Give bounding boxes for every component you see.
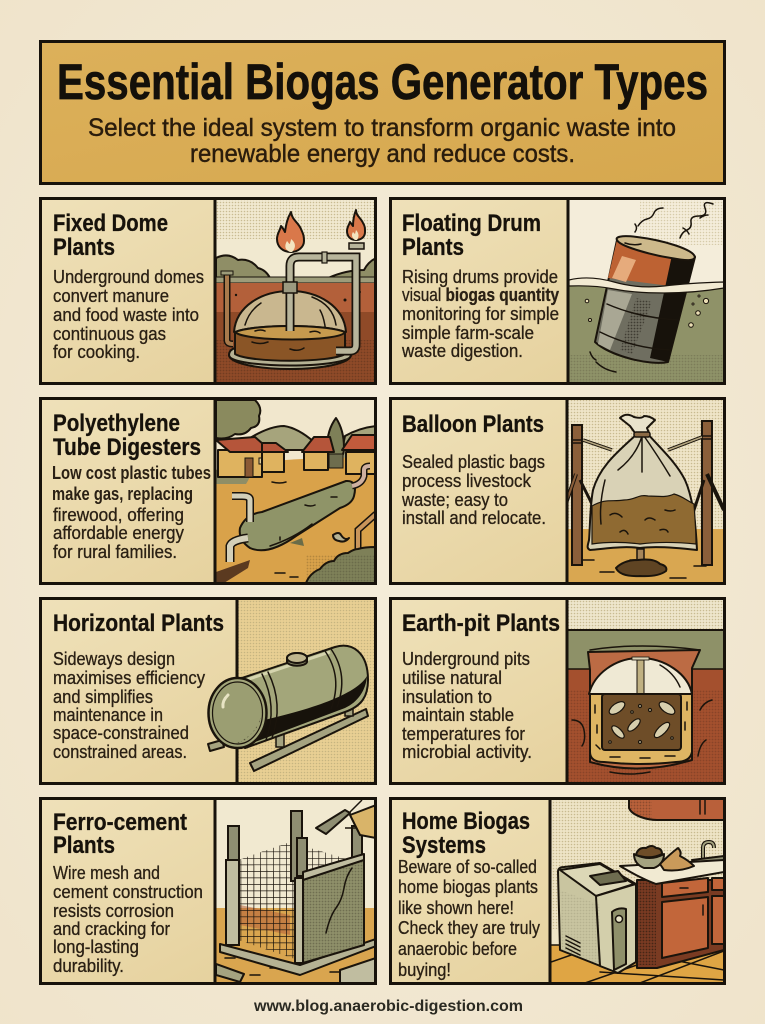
header panel (40, 42, 724, 184)
heading: Horizontal Plants: Horizontal Plants (53, 610, 224, 637)
divider (214, 398, 216, 583)
text: Ferro-cement description: and cracking for (53, 919, 170, 939)
tank end (208, 678, 266, 748)
text: Polyethylene description: firewood, offering (53, 505, 184, 525)
icon: plastic tube digester (240, 481, 355, 550)
houses (218, 450, 262, 477)
text: Balloon description: waste; easy to (401, 490, 508, 510)
panel frame (390, 398, 724, 584)
panel frame (40, 398, 376, 584)
text: Horizontal description: and simplifies (53, 687, 153, 707)
panel frame (40, 798, 376, 984)
text: Polyethylene description: make gas, replacing (52, 484, 193, 504)
posts (228, 826, 239, 861)
icon: slurry (234, 325, 346, 360)
illustration: rural village with tube digester (216, 399, 376, 583)
pipes (232, 496, 250, 522)
text: Home Biogas warning: buying! (398, 960, 451, 980)
heading: Ferro-cement Plants (53, 809, 187, 859)
illustration: kitchen with home biogas unit (551, 799, 724, 983)
icon: plastic bag (588, 433, 697, 550)
text: Balloon description: Sealed plastic bags (402, 452, 545, 472)
heading: Floating Drum Plants: Floating Drum (402, 210, 541, 237)
icon: left post (568, 424, 612, 566)
panel: Fixed Dome Plants (40, 198, 376, 384)
text: Horizontal description: maximises efficiency (53, 668, 205, 688)
icon: right post (668, 421, 724, 565)
timber pieces (216, 964, 244, 982)
illustration: floating drum (569, 199, 724, 385)
text: Home Biogas warning: Check they are truly (398, 918, 540, 938)
bag outlet and muck pile (637, 549, 644, 561)
floor (551, 945, 724, 983)
subtitle: renewable energy and reduce costs. (190, 140, 575, 168)
text: Ferro-cement description: durability. (53, 956, 124, 976)
heading: Home Biogas Systems: Systems (402, 832, 486, 859)
text: Earth-pit description: utilise natural (402, 668, 502, 688)
text: Home Biogas warning (398, 857, 540, 980)
heading: Earth-pit Plants: Earth-pit Plants (402, 610, 560, 637)
text: Earth-pit description (402, 649, 532, 762)
icon: water surface (569, 278, 724, 293)
base slab (220, 939, 376, 975)
divider (214, 198, 216, 383)
text: Ferro-cement description: cement construction (53, 882, 203, 902)
text: Fixed Dome description: for cooking. (53, 342, 140, 362)
text: Floating Drum description: waste digestion. (401, 341, 523, 361)
divider (566, 198, 570, 383)
rails (208, 740, 224, 751)
icon: counter top (620, 860, 724, 884)
panel frame (390, 598, 724, 784)
divider (214, 798, 216, 983)
text: Polyethylene description: for rural families. (53, 542, 177, 562)
heading: Polyethylene Tube Digesters: Polyethylene (53, 410, 180, 437)
icon: base ring (229, 348, 351, 369)
panel frame (40, 598, 376, 784)
heading: Home Biogas Systems: Home Biogas (402, 808, 530, 835)
icon: gas pipes (290, 257, 356, 351)
panel frame (390, 798, 724, 984)
icon: horizontal tank (208, 646, 368, 771)
heading: Fixed Dome Plants: Plants (53, 234, 115, 261)
text: Home Biogas warning: anaerobic before (398, 939, 517, 959)
icon: food waste bowl (634, 854, 664, 868)
text: Earth-pit description: temperatures for (402, 724, 525, 744)
divider (566, 398, 568, 583)
panel: Floating Drum Plants (390, 198, 725, 385)
icon: digestate with microbes (602, 694, 681, 750)
heading: Fixed Dome Plants: Fixed Dome (53, 210, 168, 237)
text: Fixed Dome description: convert manure (53, 286, 169, 306)
illustration: balloon digester (568, 400, 723, 582)
text: Polyethylene description (52, 463, 211, 562)
text: Ferro-cement description: Wire mesh and (53, 863, 160, 883)
icon: dome (234, 291, 346, 332)
left mesh (238, 860, 298, 960)
text: Home Biogas warning: Beware of so-called (398, 857, 537, 877)
text: Horizontal description (53, 649, 205, 762)
text: Floating Drum description (401, 267, 559, 361)
subtitle (88, 114, 676, 168)
text: Balloon description (401, 452, 546, 528)
panel frame (40, 198, 376, 384)
heading: Balloon Plants: Balloon Plants (402, 411, 544, 438)
icon: flame right (347, 210, 365, 240)
tank hatch (287, 653, 307, 663)
text: Horizontal description: constrained areas. (53, 742, 187, 762)
text: Earth-pit description: Underground pits (402, 649, 530, 669)
footer URL: www.blog.anaerobic-digestion.com (253, 998, 523, 1015)
heading: Ferro-cement Plants: Plants (53, 832, 115, 859)
icon: gravel layer (590, 694, 692, 764)
divider (566, 598, 568, 783)
heading: Floating Drum Plants (402, 210, 541, 261)
heading: Fixed Dome Plants (53, 210, 168, 261)
bush (306, 547, 376, 583)
heading: Polyethylene Tube Digesters (53, 410, 201, 461)
icon: sink and faucet (703, 842, 714, 860)
text: Earth-pit description: insulation to (402, 687, 492, 707)
panel: Earth-pit Plants (390, 598, 725, 784)
icon: gas dome (589, 658, 692, 694)
text: Horizontal description: maintenance in (53, 705, 163, 725)
text: Fixed Dome description (53, 267, 204, 362)
bag neck (620, 415, 655, 433)
trees (216, 400, 260, 438)
panel: Ferro-cement Plants (40, 798, 376, 984)
text: Ferro-cement description: resists corrosion (53, 901, 174, 921)
text: Balloon description: process livestock (402, 471, 532, 491)
panel: Polyethylene Tube Digesters (40, 398, 376, 584)
divider (548, 798, 552, 983)
text: Horizontal description: Sideways design (53, 649, 175, 669)
icon: bubbles (585, 295, 709, 327)
hills (250, 425, 312, 451)
text: Earth-pit description: microbial activity. (402, 742, 532, 762)
illustration: earth pit digester (568, 599, 724, 783)
icon: steam (638, 203, 713, 238)
heading: Ferro-cement Plants: Ferro-cement (53, 809, 187, 836)
pit lining (588, 650, 700, 769)
icon: flame left (277, 212, 304, 252)
trowel and hand (316, 810, 350, 834)
panel: Balloon Plants (390, 398, 725, 584)
text: Polyethylene description: Low cost plastic tubes (52, 463, 211, 483)
text: Fixed Dome description: Underground domes (53, 267, 204, 287)
subtitle: Select the ideal system to transform organic waste into (88, 114, 676, 142)
icon: left inlet pipe (227, 275, 233, 344)
heading: Floating Drum Plants: Plants (402, 234, 464, 261)
text: Polyethylene description: affordable energy (53, 523, 184, 543)
illustration background (238, 599, 376, 783)
panel: Horizontal Plants (40, 598, 376, 784)
text: Balloon description: install and relocate. (402, 508, 546, 528)
tank body (236, 646, 368, 748)
text: Fixed Dome description: continuous gas (53, 324, 166, 344)
icon: base cabinet (637, 880, 724, 968)
illustration: fixed dome digester (216, 199, 376, 383)
heading: Home Biogas Systems (402, 808, 530, 859)
text: Ferro-cement description (53, 863, 203, 976)
text: Floating Drum description: visual biogas quantity (402, 285, 559, 305)
panel: Home Biogas Systems (390, 798, 725, 984)
text: Floating Drum description: simple farm-scale (402, 323, 534, 343)
text: Horizontal description: space-constrained (53, 723, 189, 743)
icon: wall cabinet (629, 799, 724, 820)
text: Ferro-cement description: long-lasting (53, 937, 139, 957)
cement wall (303, 857, 364, 963)
illustration: ferro-cement tank (216, 799, 376, 983)
text: Floating Drum description: monitoring for simple (402, 304, 559, 324)
icon: drum (595, 240, 695, 363)
ground (216, 458, 376, 583)
icon: home biogas appliance (558, 863, 636, 973)
text: Earth-pit description: maintain stable (402, 705, 514, 725)
text: Fixed Dome description: and food waste into (53, 305, 199, 325)
heading: Polyethylene Tube Digesters: Tube Digesters (53, 434, 201, 461)
back mesh (238, 842, 350, 952)
divider (236, 598, 238, 783)
panel frame (390, 198, 724, 384)
text: Floating Drum description: Rising drums provide (402, 267, 558, 287)
text: Home Biogas warning: home biogas plants (398, 877, 538, 897)
tank bands (262, 649, 342, 740)
text: Home Biogas warning: like shown here! (398, 898, 514, 918)
